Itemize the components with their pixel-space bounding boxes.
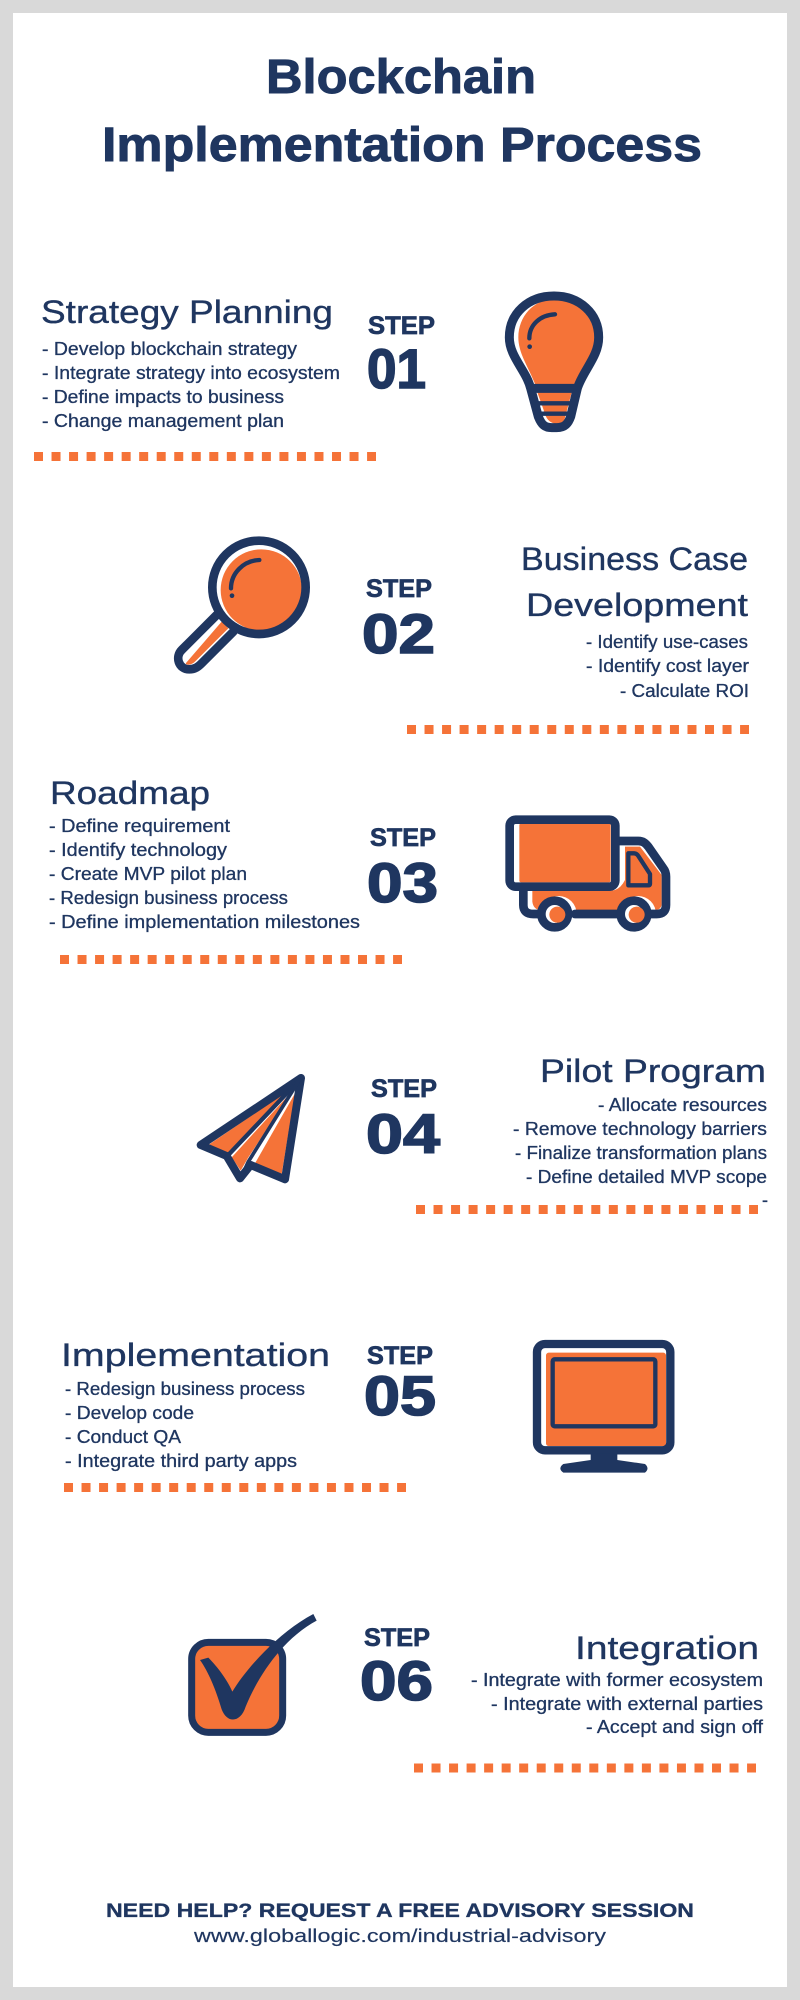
heading: Business Case Development: Development: [526, 587, 748, 623]
step label 02: [362, 575, 435, 665]
icon: checkbox with check mark: [192, 1614, 317, 1732]
step 01 section: [34, 294, 599, 456]
heading: Implementation: Implementation: [61, 1337, 330, 1373]
list: step 01 tasks: - Develop blockchain strategy: [42, 339, 297, 359]
step label 05: 05: [364, 1364, 436, 1427]
step label 06: STEP: [364, 1624, 430, 1652]
list: step 05 tasks: - Conduct QA: [65, 1427, 181, 1447]
step 02 section: [178, 541, 749, 730]
heading: Strategy Planning: Strategy Planning: [41, 294, 333, 330]
step 04 section: [201, 1053, 768, 1210]
step 06 section: [192, 1614, 764, 1768]
step label 05: [364, 1342, 436, 1427]
footer call to action: www.globallogic.com/industrial-advisory: [193, 1926, 606, 1946]
list: step 04 tasks: [513, 1095, 768, 1210]
list: step 05 tasks: - Integrate third party apps: [65, 1451, 297, 1471]
list: step 06 tasks: - Accept and sign off: [586, 1717, 764, 1737]
list: step 04 tasks: - Allocate resources: [598, 1095, 767, 1115]
list: step 05 tasks: [65, 1379, 305, 1471]
footer call to action: NEED HELP? REQUEST A FREE ADVISORY SESSION: [106, 1901, 694, 1922]
step label 02: STEP: [366, 575, 432, 603]
divider: step 06: [414, 1764, 756, 1772]
heading: Business Case Development: [521, 541, 748, 623]
list: step 02 tasks: - Calculate ROI: [620, 681, 749, 701]
step label 04: STEP: [371, 1075, 437, 1103]
list: step 02 tasks: - Identify cost layer: [586, 656, 749, 676]
step label 04: [366, 1075, 440, 1165]
list: step 01 tasks: [42, 339, 340, 431]
heading: Pilot Program: Pilot Program: [540, 1053, 766, 1089]
heading: Business Case Development: Business Case: [521, 541, 748, 577]
icon: delivery truck: [510, 820, 666, 932]
list: step 02 tasks: [586, 632, 749, 701]
step label 03: 03: [367, 851, 438, 914]
icon: magnifying glass: [178, 541, 306, 669]
list: step 01 tasks: - Integrate strategy into ecosystem: [42, 363, 340, 383]
heading: Roadmap: Roadmap: [50, 775, 210, 811]
title: Implementation Process: [102, 119, 702, 172]
list: step 02 tasks: - Identify use-cases: [586, 632, 748, 652]
divider: step 05: [64, 1483, 406, 1492]
step label 06: 06: [360, 1649, 433, 1712]
divider: step 03: [60, 955, 402, 964]
icon: computer monitor: [537, 1344, 670, 1473]
list: step 01 tasks: - Change management plan: [42, 411, 284, 431]
list: step 04 tasks: - Remove technology barriers: [513, 1119, 767, 1139]
list: step 03 tasks: - Redesign business process: [49, 888, 288, 908]
step label 01: [367, 312, 435, 400]
step label 01: 01: [367, 337, 426, 400]
icon: light bulb: [509, 296, 599, 428]
step label 03: [367, 824, 438, 914]
step 03 section: [49, 775, 666, 960]
step label 05: STEP: [367, 1342, 433, 1370]
divider: step 04: [416, 1205, 758, 1214]
step 05 section: [61, 1337, 670, 1488]
divider: step 01: [34, 452, 376, 461]
list: step 04 tasks: -: [762, 1190, 768, 1210]
list: step 04 tasks: - Define detailed MVP scope: [526, 1167, 767, 1187]
list: step 06 tasks: - Integrate with former ecosystem: [471, 1670, 763, 1690]
list: step 03 tasks: - Define implementation milestones: [49, 912, 360, 932]
list: step 03 tasks: - Define requirement: [49, 816, 230, 836]
footer call to action: [106, 1901, 694, 1946]
list: step 05 tasks: - Redesign business process: [65, 1379, 305, 1399]
step label 02: 02: [362, 602, 435, 665]
heading: Integration: Integration: [575, 1630, 759, 1666]
title: [102, 51, 702, 172]
title: Blockchain: [266, 51, 536, 104]
list: step 03 tasks: - Identify technology: [49, 840, 227, 860]
list: step 03 tasks: - Create MVP pilot plan: [49, 864, 247, 884]
list: step 01 tasks: - Define impacts to business: [42, 387, 284, 407]
step label 03: STEP: [370, 824, 436, 852]
step label 01: STEP: [368, 312, 435, 340]
step label 06: [360, 1624, 433, 1712]
divider: step 02: [407, 725, 749, 734]
list: step 05 tasks: - Develop code: [65, 1403, 194, 1423]
step label 04: 04: [366, 1102, 440, 1165]
list: step 06 tasks: [471, 1670, 764, 1737]
icon: paper plane: [201, 1078, 301, 1179]
list: step 04 tasks: - Finalize transformation plans: [515, 1143, 767, 1163]
list: step 06 tasks: - Integrate with external parties: [491, 1694, 763, 1714]
list: step 03 tasks: [49, 816, 360, 932]
